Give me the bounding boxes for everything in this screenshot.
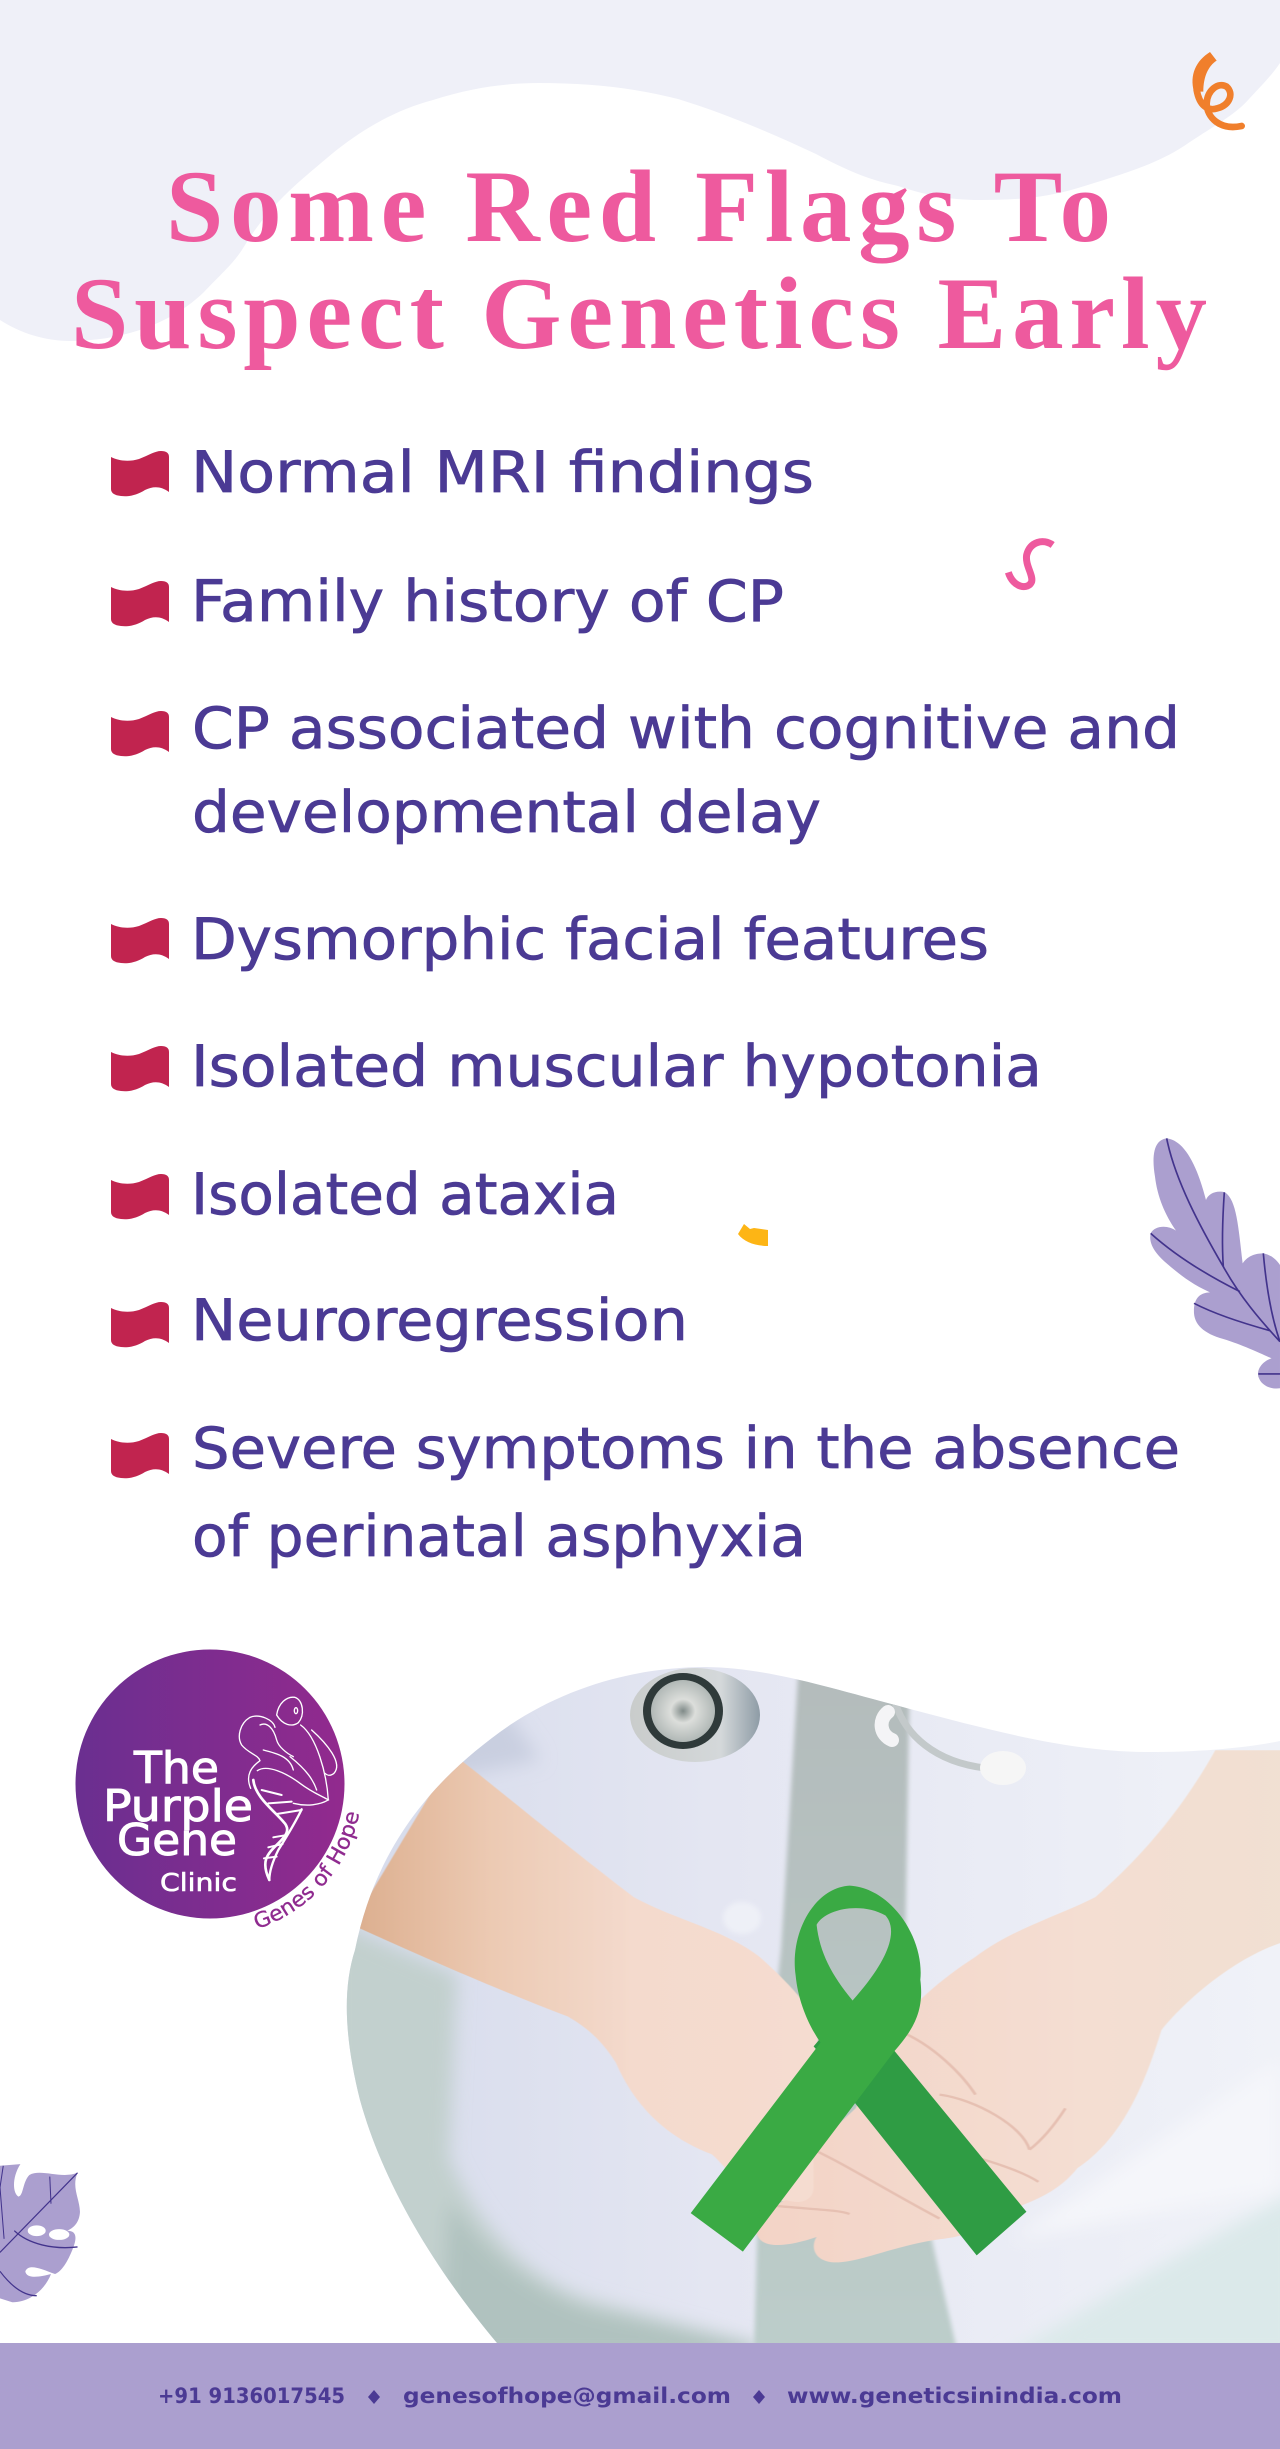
footer contact details: www.geneticsinindia.com [787, 2384, 1122, 2408]
item: CP associated with cognitive and developmental delay: CP associated with cognitive and [192, 696, 1180, 762]
item: Family history of CP: Family history of CP [191, 569, 784, 635]
footer band [0, 2343, 1280, 2449]
footer contact details: +91 9136017545 [158, 2384, 345, 2408]
icon: pink squiggle [1008, 542, 1053, 587]
icon: yellow accent [738, 1224, 768, 1246]
background wave [0, 0, 1280, 341]
footer contact details [158, 2384, 1122, 2408]
item: CP associated with cognitive and developmental delay: developmental delay [192, 780, 821, 846]
icon: orange swirl [1193, 52, 1242, 127]
icon: lavender leaf right [1150, 1138, 1280, 1389]
item: Isolated ataxia: Isolated ataxia [191, 1162, 619, 1228]
item: Severe symptoms in the absence of perinatal asphyxia: of perinatal asphyxia [192, 1504, 806, 1570]
photo: green ribbon [691, 1886, 1026, 2255]
logo wordmark [103, 1743, 253, 1897]
logo figure: mother, child and DNA helix [239, 1697, 337, 1880]
item: Isolated muscular hypotonia: Isolated muscular hypotonia [191, 1034, 1042, 1100]
photo: left arm and hand [352, 1750, 1280, 2262]
list of red flags [111, 440, 1180, 1570]
photo: stethoscope tube [882, 1702, 1026, 1785]
item: Severe symptoms in the absence of perinatal asphyxia: Severe symptoms in the absence [192, 1416, 1180, 1482]
logo wordmark: Purple [103, 1781, 253, 1832]
item: Neuroregression: Neuroregression [191, 1288, 688, 1354]
logo wordmark: Clinic [160, 1868, 237, 1897]
footer contact details: genesofhope@gmail.com [403, 2384, 731, 2408]
logo wordmark: Gene [117, 1815, 237, 1866]
logo: The Purple Gene Clinic [76, 1650, 359, 1928]
title: Suspect Genetics Early [71, 257, 1207, 371]
item: CP associated with cognitive and developmental delay [111, 696, 1180, 846]
photo: blurred clothing background [346, 1722, 1280, 2343]
photo: coat button [726, 1904, 758, 1932]
item: Normal MRI findings: Normal MRI findings [191, 440, 814, 506]
logo wordmark: The [133, 1743, 219, 1794]
item: Severe symptoms in the absence of perinatal asphyxia [111, 1416, 1180, 1570]
title [71, 150, 1207, 371]
photo: grey stripe [754, 1660, 957, 2350]
photo: hands holding a green ribbon [330, 1660, 1280, 2360]
icon: lavender leaf bottom-left [0, 2164, 80, 2302]
item: Dysmorphic facial features: Dysmorphic facial features [191, 907, 989, 973]
photo: right arm and hand [757, 1750, 1280, 2262]
logo tagline: Genes of Hope: Genes of Hope [254, 1812, 359, 1928]
title: Some Red Flags To [166, 150, 1111, 264]
photo: stethoscope disc [630, 1668, 760, 1762]
